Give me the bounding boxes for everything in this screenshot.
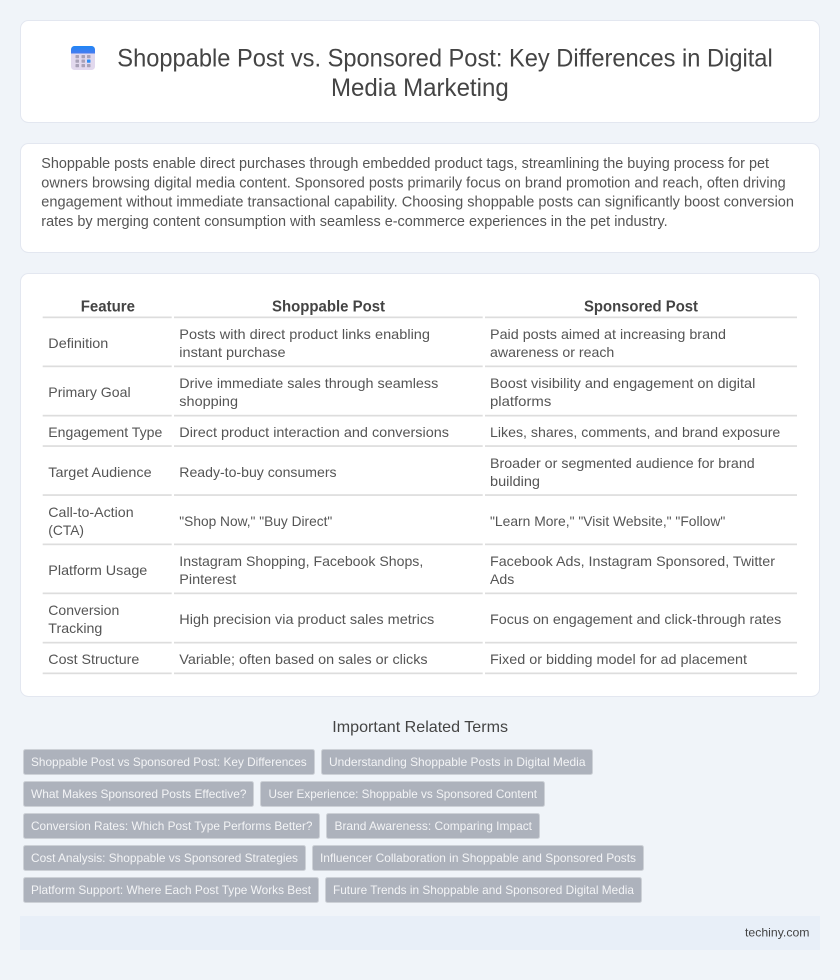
row: cost structure: Fixed or bidding model for ad placement	[490, 651, 747, 667]
row: platform usage: Ads	[490, 571, 514, 587]
row: conversion tracking	[48, 602, 781, 636]
row: conversion tracking: High precision via product sales metrics	[179, 611, 434, 627]
row: primary goal: Drive immediate sales through seamless	[179, 375, 438, 391]
row: primary goal: Boost visibility and engagement on digital	[490, 375, 755, 391]
icon: calendar	[71, 46, 95, 70]
row: call-to-action: "Learn More," "Visit Website," "Follow"	[490, 513, 725, 529]
tag: Shoppable Post vs Sponsored Post: Key Differences	[31, 755, 307, 769]
tag: Influencer Collaboration in Shoppable and Sponsored Posts	[320, 851, 636, 865]
panel: header card	[20, 20, 820, 122]
title: Media Marketing	[331, 74, 509, 102]
related term tags	[24, 750, 644, 902]
row: target audience	[48, 455, 755, 489]
tag	[326, 814, 540, 838]
row: engagement type: Engagement Type	[48, 424, 163, 440]
title: Shoppable Post vs. Sponsored Post: Key Differences in Digital	[117, 45, 773, 73]
row: target audience: building	[490, 473, 540, 489]
tag: What Makes Sponsored Posts Effective?	[31, 787, 247, 801]
row: primary goal: shopping	[179, 393, 238, 409]
intro paragraph: rates by merging content consumption with seamless e-commerce experiences in the pet industry.	[41, 214, 668, 230]
row: call-to-action	[48, 504, 725, 538]
tag	[24, 814, 320, 838]
tag	[326, 878, 642, 902]
row: primary goal	[48, 375, 755, 409]
table header row: Feature	[81, 299, 135, 316]
panel: comparison table	[20, 274, 820, 696]
tag: Future Trends in Shoppable and Sponsored Digital Media	[333, 883, 634, 897]
row: definition: Posts with direct product links enabling	[179, 326, 430, 342]
footer credit: techiny.com	[745, 926, 810, 940]
row: platform usage: Instagram Shopping, Facebook Shops,	[179, 553, 423, 569]
row: primary goal: Primary Goal	[48, 384, 131, 400]
row: conversion tracking: Focus on engagement and click-through rates	[490, 611, 781, 627]
row: definition: Definition	[48, 335, 108, 351]
row: definition: Paid posts aimed at increasing brand	[490, 326, 726, 342]
table header row	[81, 299, 698, 316]
row: engagement type: Likes, shares, comments, and brand exposure	[490, 424, 781, 440]
heading: important related terms: Important Related Terms	[332, 719, 508, 736]
tag	[24, 846, 306, 870]
intro paragraph: owners browsing digital media content. Sponsored posts primarily focus on brand promotion and reach, often driving	[41, 175, 786, 191]
row: platform usage	[48, 553, 775, 587]
row: definition	[48, 326, 726, 360]
row: target audience: Target Audience	[48, 464, 152, 480]
row: platform usage: Platform Usage	[48, 562, 148, 578]
tag: Cost Analysis: Shoppable vs Sponsored Strategies	[31, 851, 298, 865]
row: call-to-action: "Shop Now," "Buy Direct"	[179, 513, 332, 529]
footer bar	[20, 916, 820, 950]
tag	[24, 782, 254, 806]
intro paragraph: Shoppable posts enable direct purchases through embedded product tags, streamlining the buying process for pet	[41, 156, 769, 172]
tag	[322, 750, 592, 774]
tag: Understanding Shoppable Posts in Digital Media	[329, 755, 586, 769]
panel: introduction card	[20, 144, 820, 252]
title	[117, 45, 773, 102]
row: target audience: Ready-to-buy consumers	[179, 464, 337, 480]
row: primary goal: platforms	[490, 393, 551, 409]
row: engagement type: Direct product interaction and conversions	[179, 424, 449, 440]
row: definition: instant purchase	[179, 344, 286, 360]
row: engagement type	[48, 424, 781, 440]
row: target audience: Broader or segmented audience for brand	[490, 455, 755, 471]
tag	[24, 750, 314, 774]
tag	[260, 782, 544, 806]
row: cost structure: Cost Structure	[48, 651, 140, 667]
tag: Brand Awareness: Comparing Impact	[334, 819, 533, 833]
table header row: Sponsored Post	[584, 299, 698, 316]
intro paragraph	[41, 156, 794, 230]
table header row: Shoppable Post	[272, 299, 385, 316]
row: call-to-action: (CTA)	[48, 522, 84, 538]
tag: User Experience: Shoppable vs Sponsored Content	[268, 787, 538, 801]
row: cost structure	[48, 651, 747, 667]
tag: Platform Support: Where Each Post Type Works Best	[31, 883, 312, 897]
row: platform usage: Facebook Ads, Instagram Sponsored, Twitter	[490, 553, 775, 569]
row: call-to-action: Call-to-Action	[48, 504, 134, 520]
row: cost structure: Variable; often based on sales or clicks	[179, 651, 428, 667]
tag	[312, 846, 644, 870]
intro paragraph: engagement without immediate transactional capability. Choosing shoppable posts can significantly boost conversion	[41, 195, 794, 211]
row: platform usage: Pinterest	[179, 571, 236, 587]
row: conversion tracking: Conversion	[48, 602, 119, 618]
row: conversion tracking: Tracking	[48, 620, 102, 636]
tag: Conversion Rates: Which Post Type Performs Better?	[31, 819, 313, 833]
row: definition: awareness or reach	[490, 344, 614, 360]
tag	[24, 878, 318, 902]
